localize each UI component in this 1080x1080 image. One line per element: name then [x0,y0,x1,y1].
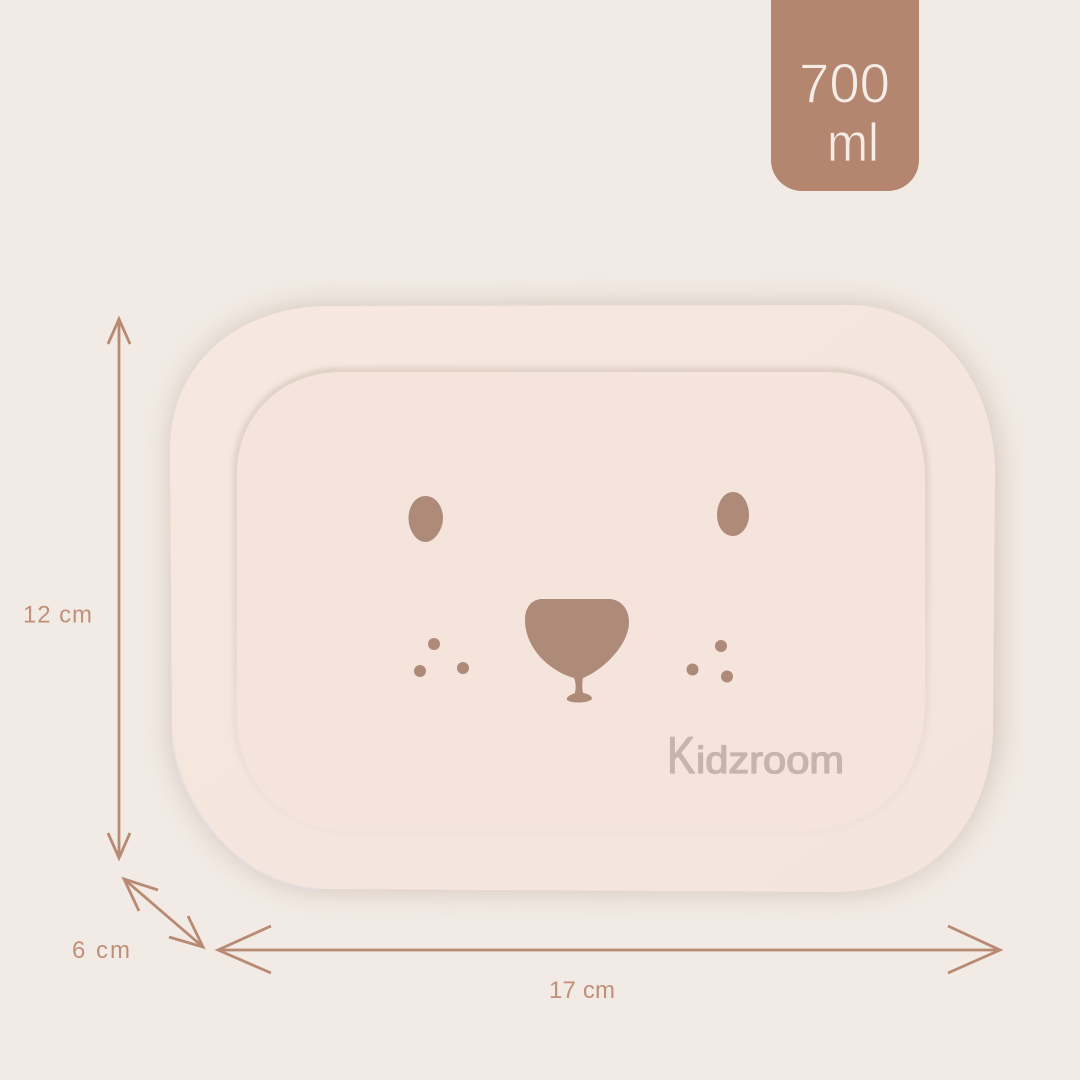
badge: 700 ml capacity: 700 [799,52,890,114]
arrow: depth [124,879,203,947]
label: 17 cm: 17 cm [549,977,615,1004]
lid shadow [172,305,998,892]
right whisker dots [686,640,733,682]
label: 12 cm: 12 cm [23,602,92,628]
arrow: width [218,926,1000,973]
right eye [717,492,749,536]
brand logo text: idzroom [696,740,844,782]
inner recess shading [236,371,926,832]
lid body [170,305,995,892]
left whisker dots [414,638,469,677]
lunch box lid [170,305,998,892]
nose [525,599,629,703]
label: 6 cm: 6 cm [72,937,130,964]
inner recess [237,372,925,831]
badge: 700 ml capacity: ml [827,113,879,173]
lid lower-left edge highlight [172,735,320,889]
arrow: height [108,319,130,858]
brand logo text: K [667,727,695,785]
left eye [408,496,443,542]
badge: 700 ml capacity [771,0,919,191]
